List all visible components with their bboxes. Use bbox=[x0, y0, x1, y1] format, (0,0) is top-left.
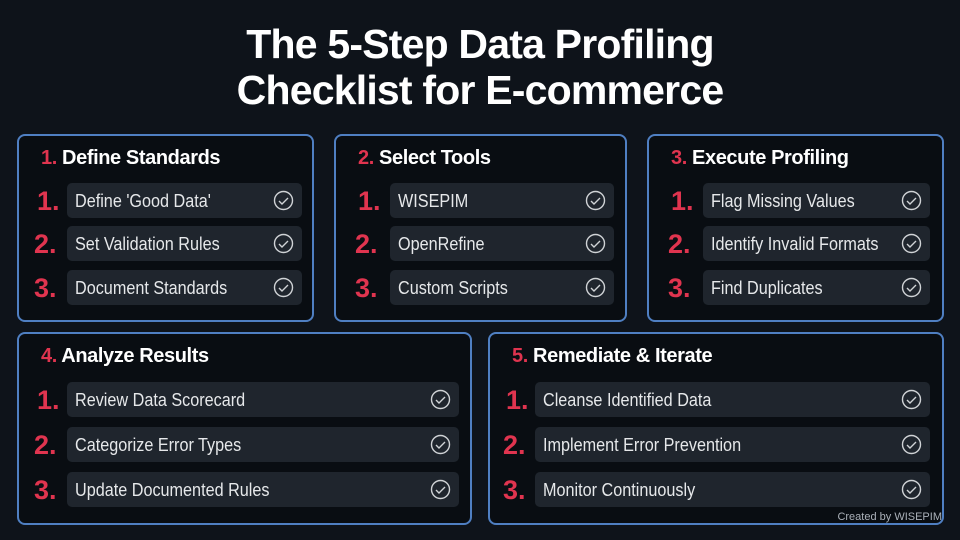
item 3: 3. bbox=[668, 273, 691, 303]
row 2: Implement Error Prevention bbox=[543, 435, 741, 455]
row 3 bbox=[67, 472, 459, 507]
row 1 bbox=[67, 183, 302, 218]
row 1: Review Data Scorecard bbox=[75, 390, 245, 410]
row 3: Find Duplicates bbox=[711, 278, 823, 298]
item 1: 1. bbox=[506, 385, 529, 415]
item 3: 3. bbox=[355, 273, 378, 303]
panel: execute profiling bbox=[647, 134, 944, 322]
row 3: Document Standards bbox=[75, 278, 227, 298]
row 1: Define 'Good Data' bbox=[75, 191, 211, 211]
title: Checklist for E-commerce bbox=[237, 67, 723, 113]
panel: define standards bbox=[17, 134, 314, 322]
title: The 5-Step Data Profiling bbox=[246, 21, 714, 67]
heading: 2. Select Tools bbox=[358, 147, 491, 169]
item 3: 3. bbox=[503, 475, 526, 505]
row 3: Update Documented Rules bbox=[75, 480, 270, 500]
item 2: 2. bbox=[668, 229, 691, 259]
row 3 bbox=[535, 472, 930, 507]
row 3: Monitor Continuously bbox=[543, 480, 695, 500]
row 2: OpenRefine bbox=[398, 234, 484, 254]
heading: 1. Define Standards bbox=[41, 147, 220, 169]
row 2: Categorize Error Types bbox=[75, 435, 241, 455]
row 1: Cleanse Identified Data bbox=[543, 390, 711, 410]
item 1: 1. bbox=[358, 186, 381, 216]
row 1 bbox=[67, 382, 459, 417]
row 3 bbox=[390, 270, 614, 305]
item 3: 3. bbox=[34, 273, 57, 303]
item 2: 2. bbox=[355, 229, 378, 259]
row 1 bbox=[390, 183, 614, 218]
row 2 bbox=[67, 427, 459, 462]
row 1 bbox=[703, 183, 930, 218]
item 1: 1. bbox=[37, 385, 60, 415]
row 2: Identify Invalid Formats bbox=[711, 234, 878, 254]
item 1: 1. bbox=[671, 186, 694, 216]
row 1: WISEPIM bbox=[398, 191, 468, 211]
title bbox=[237, 21, 723, 113]
heading: 5. Remediate & Iterate bbox=[512, 345, 712, 367]
heading: 4. Analyze Results bbox=[41, 345, 209, 367]
row 2 bbox=[390, 226, 614, 261]
panel: remediate & iterate bbox=[488, 332, 944, 525]
heading: 3. Execute Profiling bbox=[671, 147, 849, 169]
row 3 bbox=[703, 270, 930, 305]
row 1 bbox=[535, 382, 930, 417]
item 3: 3. bbox=[34, 475, 57, 505]
row 2: Set Validation Rules bbox=[75, 234, 220, 254]
row 3: Custom Scripts bbox=[398, 278, 508, 298]
item 2: 2. bbox=[503, 430, 526, 460]
row 1: Flag Missing Values bbox=[711, 191, 855, 211]
item 2: 2. bbox=[34, 229, 57, 259]
item 1: 1. bbox=[37, 186, 60, 216]
row 2 bbox=[67, 226, 302, 261]
item 2: 2. bbox=[34, 430, 57, 460]
row 3 bbox=[67, 270, 302, 305]
panel: analyze results bbox=[17, 332, 472, 525]
panel: select tools bbox=[334, 134, 627, 322]
row 2 bbox=[535, 427, 930, 462]
credit: Created by WISEPIM bbox=[837, 511, 942, 523]
row 2 bbox=[703, 226, 930, 261]
